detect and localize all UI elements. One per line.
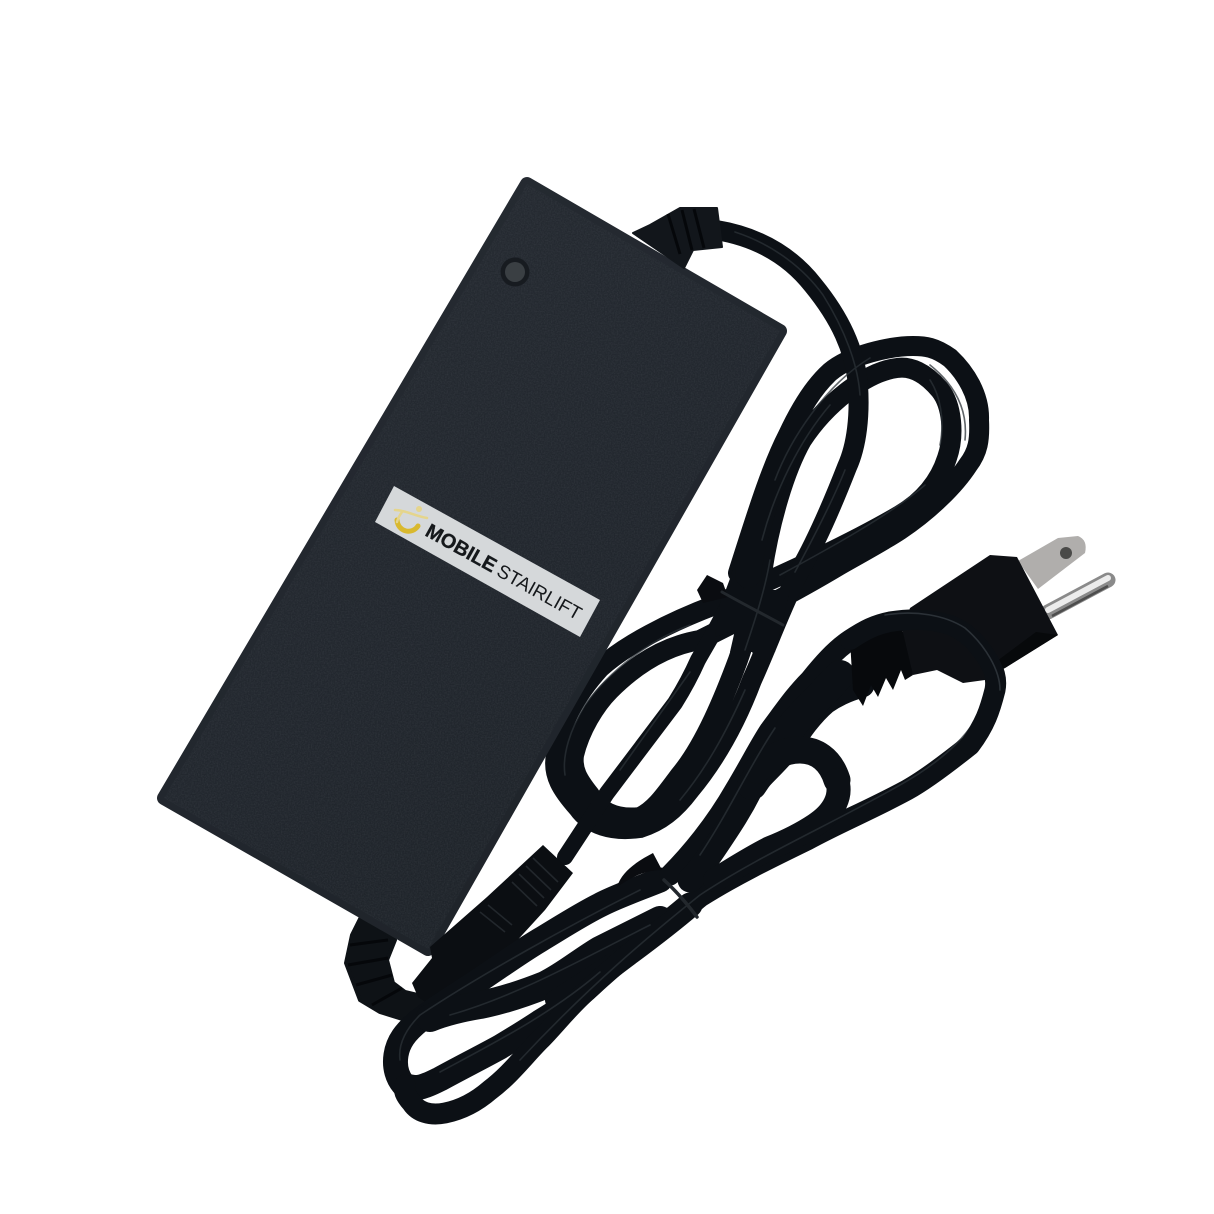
DC cord: upper lead to strain relief	[716, 230, 859, 650]
flat blade	[1018, 536, 1086, 589]
DC connector plug	[412, 845, 573, 1005]
mains cord bundle	[395, 620, 996, 1114]
DC cord: figure-eight loop and lead	[555, 230, 979, 857]
label text: MOBILESTAIRLIFT	[422, 520, 586, 625]
bottom strain relief coil	[346, 915, 430, 1022]
power indicator button	[500, 258, 530, 286]
plug head	[900, 555, 1058, 683]
cable tie: upper	[697, 575, 783, 625]
cable tie: lower	[617, 853, 697, 917]
mains plug	[850, 536, 1108, 745]
plug strain relief	[850, 620, 913, 706]
brand label	[375, 486, 600, 637]
DC cord: solid bundle above the tie	[748, 432, 795, 575]
top strain relief	[633, 208, 722, 268]
round ground pin	[1048, 578, 1108, 616]
DC cord: solid bundle at the tie	[715, 590, 790, 652]
charger body	[164, 184, 780, 949]
DC cord: diagonal lead to connector	[565, 555, 745, 857]
ring of cord over the plug	[850, 613, 1000, 745]
label logo	[395, 506, 427, 531]
